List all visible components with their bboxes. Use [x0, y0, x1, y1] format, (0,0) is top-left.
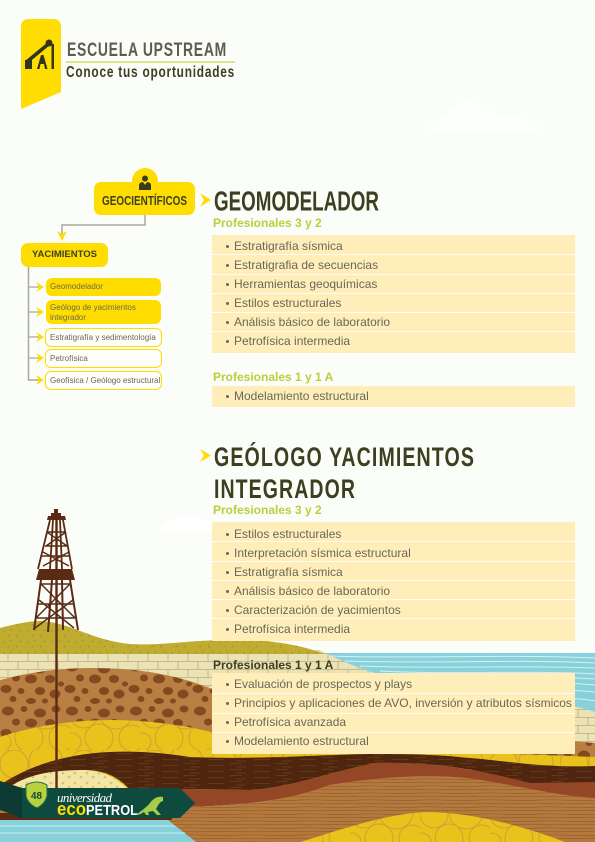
panel: geomodelador 3 y 2: Estilos estructurales: [234, 296, 341, 310]
list item: geofisica: [45, 371, 162, 390]
panel: geologo 1 y 1 A: Evaluación de prospectos y plays: [234, 677, 412, 691]
icon: iguana: [136, 797, 163, 815]
header title: [66, 40, 235, 81]
panel: geomodelador 3 y 2: Análisis básico de laboratorio: [234, 315, 390, 329]
subheading: profesionales 1 y 1 A dark: Profesionales 1 y 1 A: [213, 658, 333, 672]
logo text: [57, 790, 138, 819]
list item: geofisica: Geofísica / Geólogo estructural: [50, 376, 160, 385]
panel: geologo 1 y 1 A: Modelamiento estructural: [234, 734, 369, 748]
connector arrows: [28, 193, 211, 385]
list item: petrofisica: [45, 349, 162, 368]
logo text: eco: [57, 799, 86, 819]
yacimientos box: YACIMIENTOS: [32, 249, 97, 260]
panel: geomodelador 3 y 2: Estratigrafía sísmica: [234, 239, 343, 253]
list item: estratigrafia: Estratigrafía y sedimentología: [50, 333, 156, 342]
panel: geologo 1 y 1 A: Petrofísica avanzada: [234, 715, 346, 729]
org chart: geocientificos: [21, 168, 211, 385]
panel: geomodelador 1 y 1 A: [212, 386, 575, 407]
panel: geomodelador 3 y 2: Estratigrafia de secuencias: [234, 258, 378, 272]
list item: geomodelador: Geomodelador: [50, 282, 103, 291]
panel: geologo 3 y 2: Estilos estructurales: [234, 527, 341, 541]
panel: geomodelador 3 y 2: Petrofísica intermedia: [234, 334, 350, 348]
panel: geologo 3 y 2: [212, 522, 575, 641]
panel: geologo 3 y 2: Petrofísica intermedia: [234, 622, 350, 636]
geocientificos box: [94, 168, 195, 215]
heading: geologo yacimientos integrador: [200, 441, 475, 504]
panel: geologo 1 y 1 A: Principios y aplicaciones de AVO, inversión y atributos sísmicos: [234, 696, 572, 710]
panel: geologo 3 y 2: Estratigrafía sísmica: [234, 565, 343, 579]
list item: petrofisica: Petrofísica: [50, 354, 88, 363]
subheading: profesionales 1 y 1 A: Profesionales 1 y 1 A: [213, 370, 333, 384]
panel: geomodelador 3 y 2: Herramientas geoquímicas: [234, 277, 377, 291]
header logo: yellow tab with pump jack: [21, 19, 61, 109]
icon: pump jack: [25, 40, 54, 69]
icon: person: [139, 176, 151, 190]
panel: geomodelador 3 y 2: [212, 235, 575, 353]
heading: geologo yacimientos integrador: INTEGRADOR: [214, 474, 356, 504]
subheading: profesionales 3 y 2: Profesionales 3 y 2: [213, 216, 322, 230]
icon: oil derrick: [33, 509, 79, 788]
list item: estratigrafia: [45, 328, 162, 347]
panel: geologo 3 y 2: Caracterización de yacimientos: [234, 603, 401, 617]
badge: page number 48: [26, 782, 47, 808]
logo text: universidad: [57, 790, 112, 805]
panel: geologo 3 y 2: Análisis básico de laboratorio: [234, 584, 390, 598]
panel: geologo 1 y 1 A: [212, 673, 575, 754]
list item: geologo de yacimientos integrador: integrador: [50, 313, 86, 322]
list item: geologo de yacimientos integrador: [46, 300, 161, 324]
logo text: PETROL: [86, 802, 138, 819]
panel: geomodelador 1 y 1 A: Modelamiento estructural: [234, 389, 369, 403]
yacimientos box: [21, 243, 108, 267]
list item: geologo de yacimientos integrador: Geólogo de yacimientos: [50, 303, 136, 312]
subheading: profesionales 3 y 2: Profesionales 3 y 2: [213, 503, 322, 517]
footer banner: universidad ecopetrol: [0, 781, 195, 819]
panel: geologo 3 y 2: Interpretación sísmica estructural: [234, 546, 411, 560]
badge: page number 48: 48: [31, 791, 42, 802]
list item: geomodelador: [46, 278, 161, 296]
